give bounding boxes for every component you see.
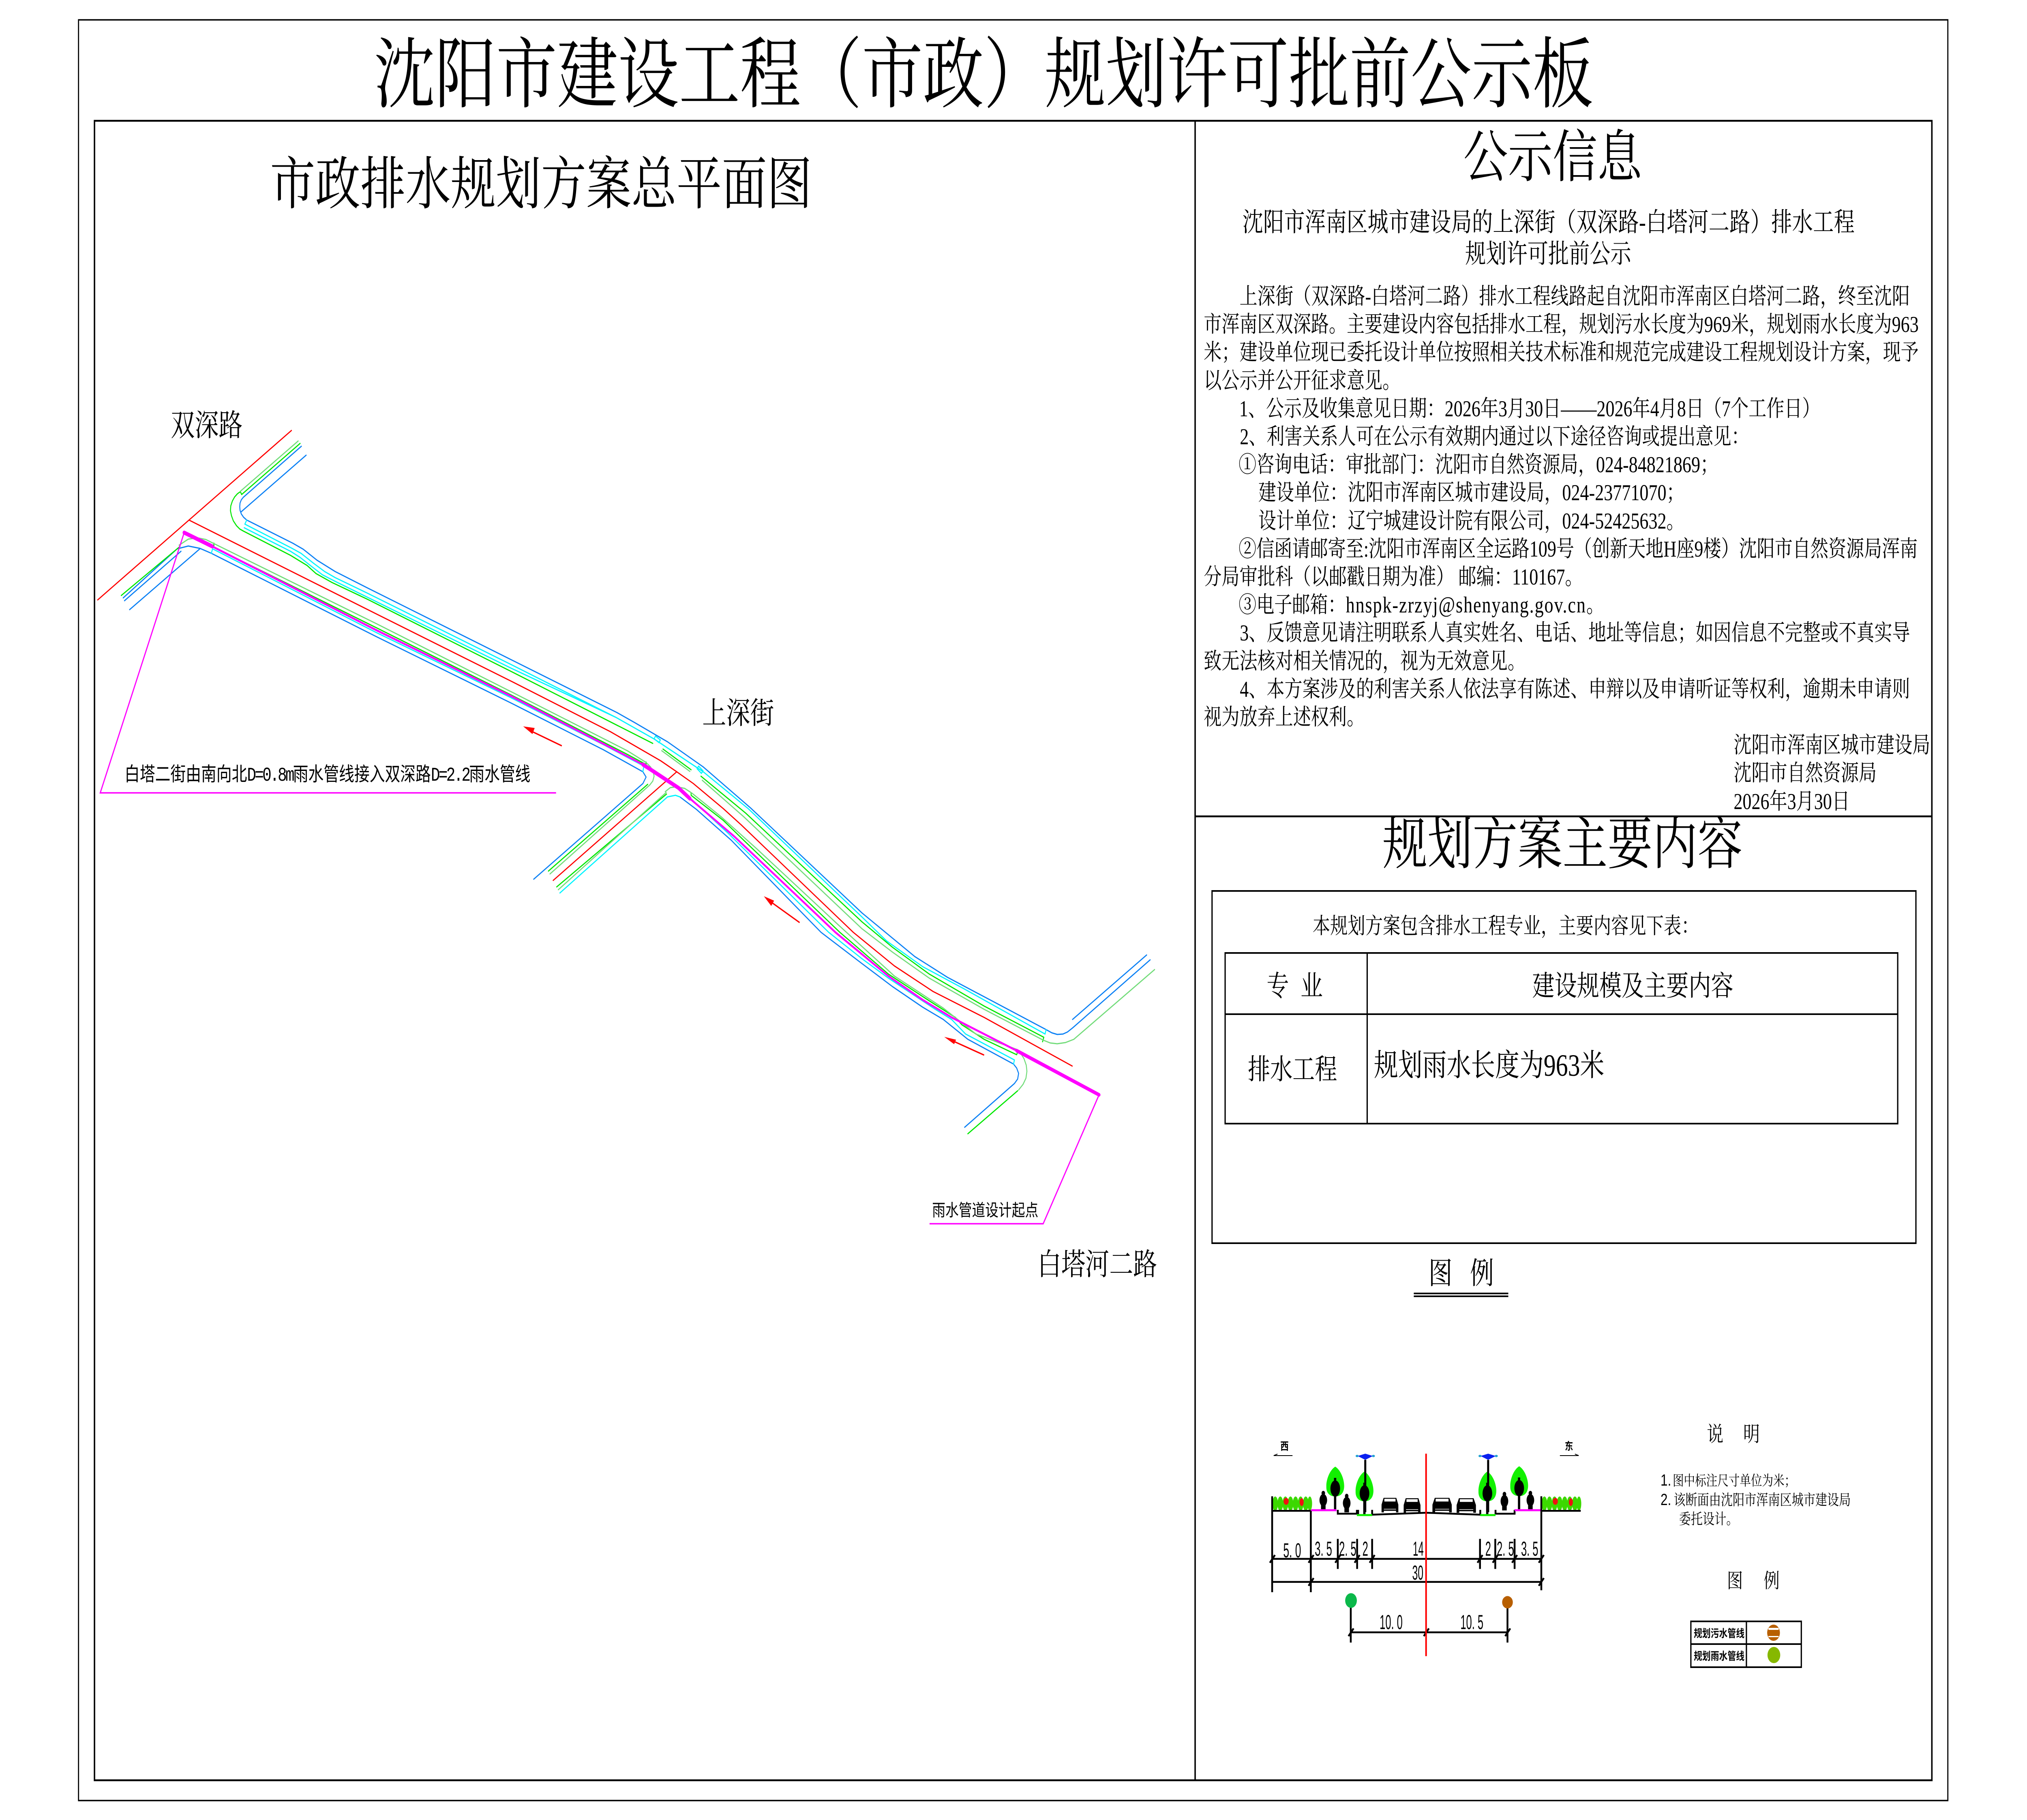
legend: rain (1694, 1647, 1780, 1663)
note 1: 图中标注尺寸单位为米； (1673, 1473, 1796, 1489)
callout: connection note (100, 533, 556, 793)
pedestrians (1320, 1491, 1534, 1512)
cross-section shapes (1270, 1454, 1581, 1656)
note 2: 该断面由沈阳市浑南区城市建设局 (1673, 1492, 1851, 1509)
notice body text: 米；建设单位现已委托设计单位按照相关技术标准和规范完成建设工程规划设计方案，现予 (1204, 340, 1919, 365)
notice body text: 市浑南区双深路。主要建设内容包括排水工程，规划污水长度为969米，规划雨水长度为963 (1204, 312, 1919, 337)
notice heading: 公示信息 (1463, 127, 1643, 189)
flow arrow 3 (944, 1037, 984, 1055)
notice body text: ①咨询电话：审批部门：沈阳市自然资源局，024-84821869； (1238, 452, 1718, 477)
callout: design start point: 雨水管道设计起点 (932, 1201, 1038, 1220)
legend heading (1414, 1257, 1508, 1296)
shrubs (1273, 1497, 1581, 1511)
dimension numbers: 2. 5 (1339, 1537, 1356, 1560)
legend: sewer (1694, 1625, 1780, 1641)
road label: 上深街: 上深街 (702, 696, 774, 730)
street lamps (1356, 1454, 1498, 1512)
light green pipe lines (179, 441, 1155, 1090)
content table: 建设规模及主要内容 (1532, 970, 1733, 1002)
direction labels (1280, 1441, 1573, 1452)
dimension numbers: 10. 5 (1460, 1610, 1483, 1634)
note 2: 2. (1661, 1490, 1671, 1509)
flow arrow 1 (523, 726, 562, 746)
notice body text: 致无法核对相关情况的，视为无效意见。 (1204, 649, 1526, 674)
notice body text: 视为放弃上述权利。 (1204, 704, 1365, 730)
cyan lines (211, 520, 1046, 1064)
panel: public notice (1204, 127, 1930, 814)
sewer pipe marker (1502, 1596, 1513, 1608)
notice signature (1733, 732, 1930, 814)
rain pipe marker (1345, 1593, 1357, 1608)
notice body text: ③电子邮箱：hnspk-zrzyj@shenyang.gov.cn。 (1238, 592, 1604, 617)
notice body text: 上深街（双深路-白塔河二路）排水工程线路起自沈阳市浑南区白塔河二路，终至沈阳 (1239, 284, 1910, 309)
notice body text: ②信函请邮寄至:沈阳市浑南区全运路109号（创新天地H座9楼）沈阳市自然资源局浑南 (1238, 536, 1918, 561)
direction labels: 东 (1565, 1441, 1573, 1452)
road label: 白塔河二路: 白塔河二路 (1037, 1248, 1157, 1282)
legend heading: 图 例 (1429, 1257, 1494, 1291)
main title: 沈阳市建设工程（市政）规划许可批前公示板 (374, 33, 1594, 118)
content table (1225, 953, 1898, 1124)
notice body text: 以公示并公开征求意见。 (1204, 368, 1400, 393)
blue road edge lines (123, 446, 1150, 1127)
legend table (1691, 1621, 1801, 1667)
notice subtitle: 规划许可批前公示 (1465, 239, 1631, 268)
legend: rain: 规划雨水管线 (1694, 1651, 1744, 1663)
content box (1212, 891, 1916, 1243)
dimension numbers: 3. 5 (1315, 1537, 1332, 1560)
notice body text: 3、反馈意见请注明联系人真实姓名、电话、地址等信息；如因信息不完整或不真实导 (1240, 620, 1910, 645)
road label: 双深路: 双深路 (171, 409, 242, 443)
dimension numbers: 10. 0 (1380, 1610, 1403, 1634)
centre line (1425, 1454, 1427, 1656)
content heading: 规划方案主要内容 (1382, 814, 1742, 876)
content table: 排水工程 (1248, 1054, 1337, 1086)
trees (1326, 1466, 1528, 1516)
plan heading: 市政排水规划方案总平面图 (270, 153, 812, 216)
notice signature: 沈阳市自然资源局 (1733, 760, 1877, 786)
note 1: 1. (1661, 1471, 1671, 1489)
notice body text: 分局审批科（以邮戳日期为准） 邮编：110167。 (1204, 564, 1583, 589)
note 2: 委托设计。 (1679, 1511, 1738, 1528)
direction arrows (1274, 1454, 1579, 1456)
dimension lines (1270, 1496, 1544, 1642)
cross-section drawing (1270, 1441, 1581, 1656)
callout: connection note: 白塔二街由南向北D=0.8m雨水管线接入双深路D=2.2雨水管线 (124, 764, 530, 786)
dimension numbers (1283, 1537, 1538, 1634)
notice body text: 2、利害关系人可在公示有效期内通过以下途径咨询或提出意见： (1240, 424, 1749, 449)
legend: sewer: 规划污水管线 (1694, 1628, 1744, 1640)
direction labels: 西 (1280, 1441, 1289, 1452)
magenta design rainwater pipe (184, 533, 1099, 1095)
content intro: 本规划方案包含排水工程专业，主要内容见下表： (1313, 914, 1699, 938)
plan panel (98, 153, 1157, 1282)
dimension numbers: 2. 5 (1497, 1537, 1514, 1560)
explanatory notes (1661, 1423, 1851, 1528)
notice body text: 4、本方案涉及的利害关系人依法享有陈述、申辩以及申请听证等权利，逾期未申请则 (1240, 677, 1910, 702)
notice subtitle: 沈阳市浑南区城市建设局的上深街（双深路-白塔河二路）排水工程 (1243, 208, 1855, 237)
red road centre lines (98, 430, 1072, 1066)
notice subtitle (1243, 208, 1855, 268)
dimension numbers: 30 (1412, 1561, 1423, 1584)
notice signature: 2026年3月30日 (1733, 789, 1850, 814)
content table: 规划雨水长度为963米 (1374, 1048, 1604, 1083)
cars (1382, 1498, 1476, 1513)
notice signature: 沈阳市浑南区城市建设局 (1733, 732, 1930, 758)
notice body text: 设计单位：辽宁城建设计院有限公司，024-52425632。 (1258, 508, 1684, 533)
panel: plan content (1212, 814, 1916, 1296)
notes heading: 说 明 (1707, 1423, 1760, 1446)
pipe legend (1691, 1570, 1801, 1667)
dimension numbers: 14 (1413, 1537, 1424, 1560)
green pipe lines (121, 443, 1044, 1134)
road surface lines (1272, 1510, 1581, 1515)
dimension numbers: 2 (1485, 1537, 1491, 1560)
dimension numbers: 2 (1363, 1537, 1368, 1560)
callout: design start point (930, 1095, 1099, 1224)
content table: 专 业 (1266, 970, 1323, 1002)
notice body text: 建设单位：沈阳市浑南区城市建设局，024-23771070； (1258, 480, 1684, 505)
legend heading: 图 例 (1727, 1570, 1780, 1592)
notice body text (1204, 284, 1919, 730)
note 2 (1661, 1490, 1851, 1528)
flow arrow 2 (764, 896, 799, 923)
notice body text: 1、公示及收集意见日期：2026年3月30日——2026年4月8日（7个工作日） (1239, 396, 1820, 421)
dimension numbers: 5. 0 (1283, 1539, 1301, 1562)
dimension numbers: 3. 5 (1521, 1537, 1538, 1560)
